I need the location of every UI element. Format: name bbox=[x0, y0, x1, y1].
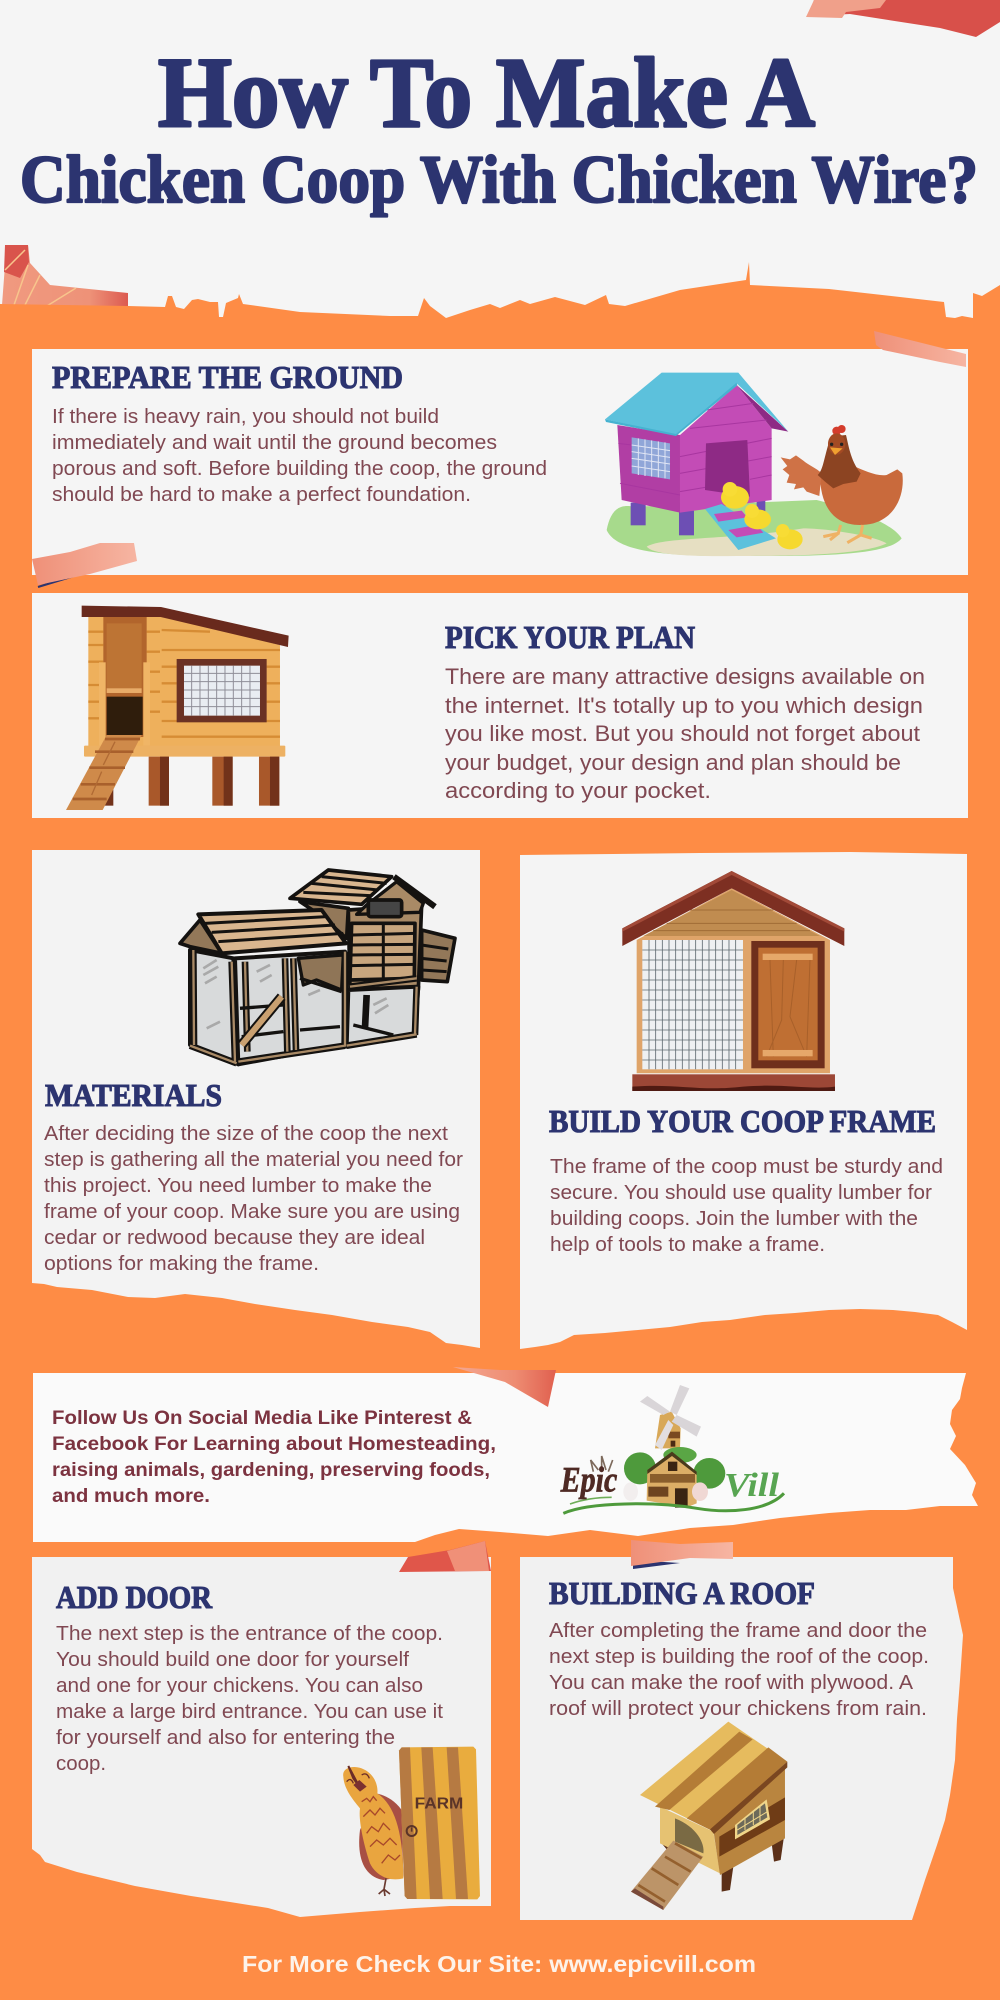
tape: top right bbox=[806, 0, 1000, 37]
body text: your budget, your design and plan should be bbox=[445, 750, 901, 775]
panel: add door bbox=[32, 1541, 491, 1917]
social media text: Facebook For Learning about Homesteading, bbox=[52, 1433, 496, 1455]
body text: The next step is the entrance of the coop. bbox=[56, 1622, 443, 1645]
body text bbox=[56, 1622, 443, 1775]
social media text: Follow Us On Social Media Like Pinterest & bbox=[52, 1407, 472, 1429]
body text: make a large bird entrance. You can use it bbox=[56, 1700, 443, 1723]
heading: BUILDING A ROOF bbox=[549, 1575, 815, 1611]
body text: according to your pocket. bbox=[445, 778, 711, 803]
title: How To Make A bbox=[158, 37, 815, 148]
body text: secure. You should use quality lumber for bbox=[550, 1182, 932, 1204]
heading: ADD DOOR bbox=[56, 1579, 213, 1615]
body text: options for making the frame. bbox=[44, 1253, 319, 1275]
body text bbox=[44, 1123, 463, 1275]
illustration: coop with striped roof bbox=[631, 1722, 787, 1910]
heading: PREPARE THE GROUND bbox=[52, 359, 403, 395]
body text: After completing the frame and door the bbox=[549, 1619, 927, 1642]
body text: The frame of the coop must be sturdy and bbox=[550, 1156, 943, 1178]
body text bbox=[550, 1156, 943, 1256]
heading: PICK YOUR PLAN bbox=[445, 619, 695, 655]
social media text: and much more. bbox=[52, 1485, 210, 1507]
panel: materials bbox=[32, 850, 480, 1348]
body text: building coops. Join the lumber with the bbox=[550, 1208, 918, 1230]
illustration: hen peeking behind farm door bbox=[343, 1747, 480, 1899]
body text: You can make the roof with plywood. A bbox=[549, 1671, 913, 1694]
body text: cedar or redwood because they are ideal bbox=[44, 1227, 425, 1249]
body text: next step is building the roof of the coop. bbox=[549, 1645, 929, 1668]
tape: panel top right bbox=[874, 331, 966, 367]
body text: coop. bbox=[56, 1752, 106, 1775]
body text: porous and soft. Before building the coop, the ground bbox=[52, 458, 547, 480]
body text: frame of your coop. Make sure you are using bbox=[44, 1201, 460, 1223]
body text: and one for your chickens. You can also bbox=[56, 1674, 423, 1697]
tape: follow panel bbox=[453, 1367, 556, 1407]
tape: panel bottom left bbox=[32, 543, 137, 587]
illustration: coop frame bbox=[622, 871, 844, 1091]
illustration: sketched coop bbox=[180, 870, 455, 1064]
body text: this project. You need lumber to make the bbox=[44, 1175, 432, 1197]
body text: There are many attractive designs available on bbox=[445, 664, 925, 689]
panel: follow us bbox=[33, 1367, 978, 1542]
body text bbox=[52, 406, 547, 506]
body text: immediately and wait until the ground becomes bbox=[52, 432, 497, 454]
body text: should be hard to make a perfect foundation. bbox=[52, 484, 471, 506]
heading: BUILD YOUR COOP FRAME bbox=[549, 1103, 936, 1139]
panel: pick your plan bbox=[32, 593, 968, 818]
tape: left of torn edge bbox=[0, 245, 128, 318]
body text: roof will protect your chickens from rain. bbox=[549, 1697, 927, 1720]
panel: build your coop frame bbox=[520, 852, 967, 1349]
body text: step is gathering all the material you need for bbox=[44, 1149, 463, 1171]
illustration: hen peeking behind farm door: FARM bbox=[415, 1796, 463, 1813]
body text: help of tools to make a frame. bbox=[550, 1234, 825, 1256]
logo: Epic Vill: Vill bbox=[724, 1467, 780, 1504]
social media text: raising animals, gardening, preserving foods, bbox=[52, 1459, 490, 1481]
body text: You should build one door for yourself bbox=[56, 1648, 409, 1671]
logo: Epic Vill: Epic bbox=[560, 1460, 617, 1500]
illustration: purple coop with hen and chicks bbox=[605, 373, 903, 556]
panel: building a roof bbox=[520, 1540, 963, 1920]
body text: If there is heavy rain, you should not build bbox=[52, 406, 439, 428]
panel: prepare the ground bbox=[32, 331, 968, 587]
body text: After deciding the size of the coop the next bbox=[44, 1123, 448, 1145]
illustration: wooden coop with ramp bbox=[66, 606, 289, 810]
body text: the internet. It's totally up to you which design bbox=[445, 693, 923, 718]
body text: for yourself and also for entering the bbox=[56, 1726, 395, 1749]
heading: MATERIALS bbox=[45, 1077, 222, 1113]
tape: add door panel bbox=[399, 1541, 491, 1572]
body text bbox=[445, 664, 925, 803]
tape: roof panel bbox=[631, 1540, 733, 1569]
title bbox=[20, 37, 978, 217]
footer link: For More Check Our Site: www.epicvill.com bbox=[242, 1951, 756, 1977]
body text bbox=[549, 1619, 929, 1720]
social media text bbox=[52, 1407, 496, 1507]
body text: you like most. But you should not forget about bbox=[445, 721, 920, 746]
logo: Epic Vill bbox=[560, 1385, 784, 1513]
